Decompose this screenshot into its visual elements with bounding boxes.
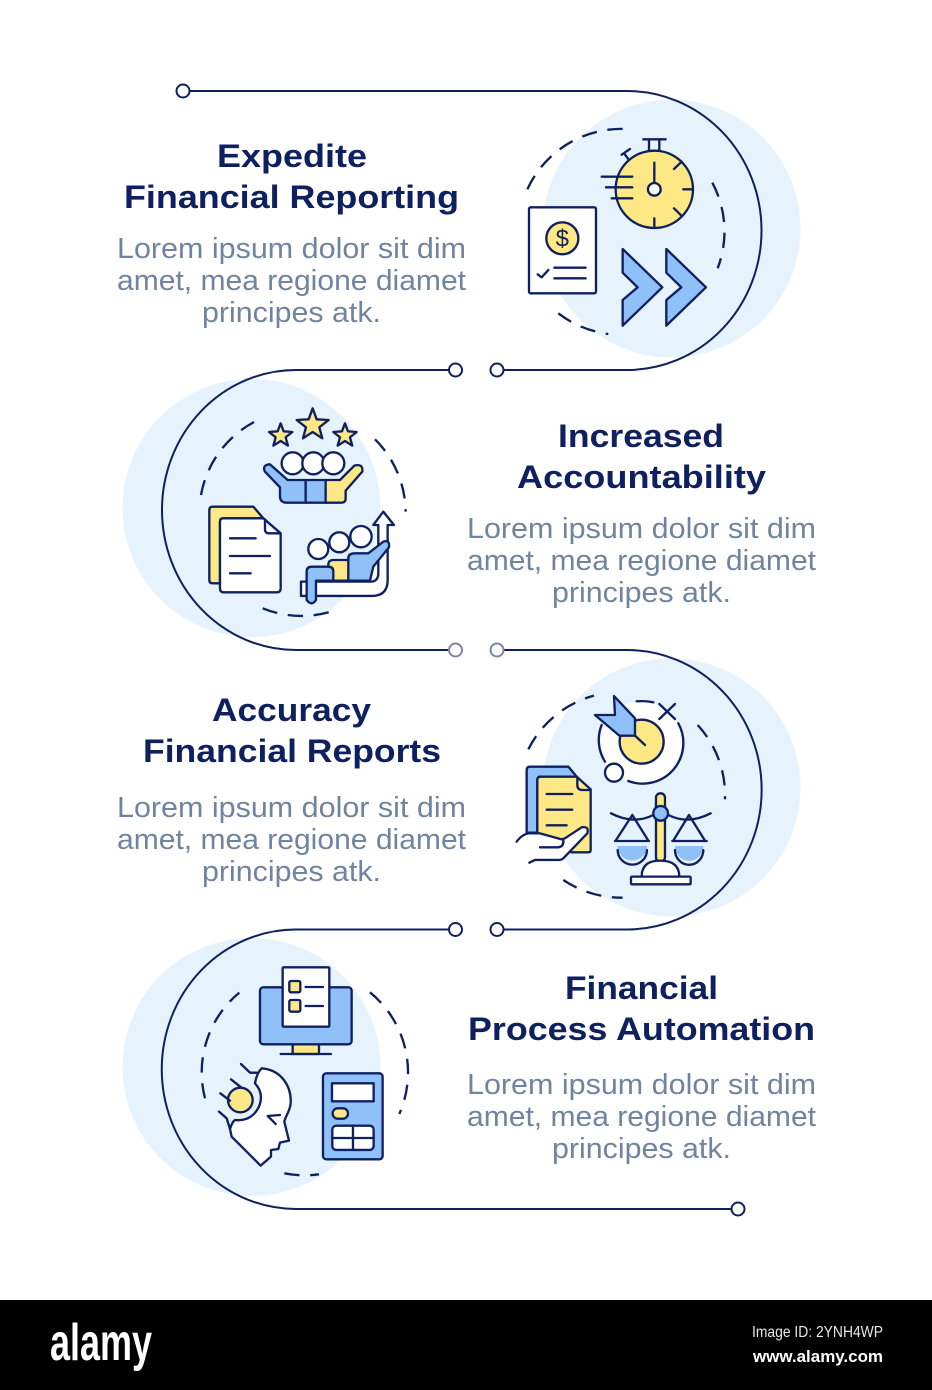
icon: stopwatch, invoice and fast-forward (527, 129, 724, 334)
body text (117, 233, 466, 329)
image id: Image ID: 2YNH4WP (752, 1324, 883, 1341)
pale blue discs (122, 100, 800, 1196)
footer bar (0, 1300, 932, 1390)
heading: Financial Reporting (124, 179, 459, 215)
panel: increased accountability text (467, 418, 816, 609)
website: www.alamy.com (752, 1347, 883, 1366)
body text: Lorem ipsum dolor sit dim (467, 513, 816, 545)
body text: Lorem ipsum dolor sit dim (467, 1069, 816, 1101)
panel: financial process automation text (467, 970, 816, 1165)
body text: amet, mea regione diamet (117, 824, 466, 856)
heading: Financial Reports (143, 733, 441, 769)
icon: stopwatch, invoice and fast-forward: $ (556, 226, 569, 253)
body text (117, 792, 466, 888)
heading: Increased (558, 418, 724, 454)
body text: principes atk. (552, 577, 731, 609)
heading (517, 418, 766, 495)
heading: Accountability (517, 459, 766, 495)
body text: amet, mea regione diamet (117, 265, 466, 297)
panel: accuracy financial reports text (117, 692, 466, 888)
heading: Accuracy (212, 692, 371, 728)
body text: principes atk. (552, 1133, 731, 1165)
icon: target, report in hand and scales (517, 696, 725, 898)
body text: Lorem ipsum dolor sit dim (117, 792, 466, 824)
heading: Process Automation (468, 1011, 815, 1047)
body text (467, 513, 816, 609)
icon: star-rated team, documents and growth (201, 408, 406, 616)
heading: Financial (565, 970, 718, 1006)
panel: expedite financial reporting text (117, 138, 466, 329)
body text: amet, mea regione diamet (467, 1101, 816, 1133)
connecting timeline (162, 84, 762, 1216)
alamy logo: alamy (50, 1314, 152, 1372)
heading (124, 138, 459, 215)
heading (468, 970, 815, 1047)
body text: principes atk. (202, 297, 381, 329)
body text: principes atk. (202, 856, 381, 888)
heading (143, 692, 441, 769)
icon: monitor checklist, AI head and calculator (202, 967, 408, 1175)
body text (467, 1069, 816, 1165)
heading: Expedite (217, 138, 367, 174)
body text: amet, mea regione diamet (467, 545, 816, 577)
body text: Lorem ipsum dolor sit dim (117, 233, 466, 265)
